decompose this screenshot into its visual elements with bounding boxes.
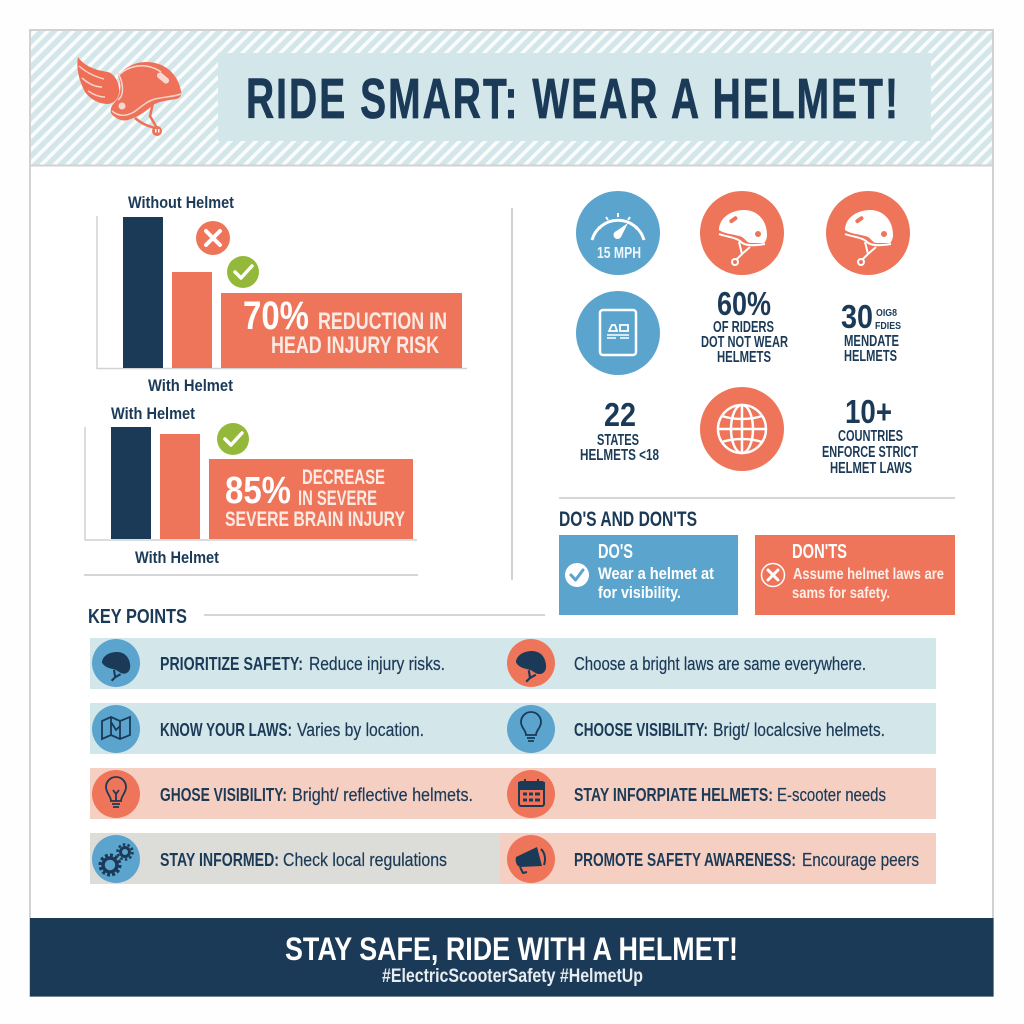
panel: do's: DO'S xyxy=(598,541,633,563)
callout: 85% decrease: SEVERE BRAIN INJURY xyxy=(225,508,405,531)
stat: 30: FDIES xyxy=(875,321,901,332)
callout: 85% decrease: 85% xyxy=(225,470,291,512)
panel: do's and don'ts: DO'S AND DON'TS xyxy=(559,508,697,531)
panel: don'ts: sams for safety. xyxy=(792,585,890,602)
header banner xyxy=(30,31,993,166)
key point: promote safety awareness: PROMOTE SAFETY AWARENESS: xyxy=(574,850,796,870)
stat: 60%: HELMETS xyxy=(717,349,771,366)
heading: key points: KEY POINTS xyxy=(88,606,187,628)
panel: don'ts xyxy=(755,535,955,615)
icon: globe xyxy=(700,387,784,471)
key point: know your laws xyxy=(92,705,424,753)
callout: 70% reduction: 70% xyxy=(243,294,309,338)
key point: choose a bright: Choose a bright laws are same everywhere. xyxy=(574,654,866,674)
stat: 10+: 10+ xyxy=(845,393,892,430)
bar chart: head injury: Without Helmet xyxy=(128,193,234,212)
panel: key points rows xyxy=(90,638,936,884)
bar chart: brain injury: With Helmet xyxy=(135,548,219,567)
stat: 30: MENDATE xyxy=(844,333,899,350)
icon: winged helmet logo xyxy=(77,57,181,136)
stat: 30: 30 xyxy=(841,298,873,335)
panel: don'ts: Assume helmet laws are xyxy=(793,566,944,583)
callout: 70% reduction xyxy=(221,293,462,368)
callout: 70% reduction: REDUCTION IN xyxy=(318,308,447,335)
icon: check badge xyxy=(227,256,259,288)
bar chart: brain injury xyxy=(85,404,417,567)
key point: choose visibility: Brigt/ localcsive helmets. xyxy=(713,720,885,740)
stat: 60%: DOT NOT WEAR xyxy=(701,334,788,351)
callout: 70% reduction: HEAD INJURY RISK xyxy=(271,332,439,359)
stat: 30: HELMETS xyxy=(844,348,897,365)
stat: 22: STATES xyxy=(597,432,639,449)
icon: speedometer 15 mph: 15 MPH xyxy=(597,245,641,262)
callout: 85% decrease: IN SEVERE xyxy=(298,487,377,510)
footer banner: STAY SAFE, RIDE WITH A HELMET! xyxy=(285,931,738,967)
key point: prioritize safety: Reduce injury risks. xyxy=(309,654,445,674)
bar chart: head injury: With Helmet xyxy=(148,376,233,395)
panel: do's xyxy=(559,535,738,615)
key point: prioritize safety xyxy=(92,639,445,687)
footer banner xyxy=(30,918,994,996)
stat: 22: 22 xyxy=(604,396,636,433)
stat: 10+ xyxy=(822,393,918,477)
panel: do's: for visibility. xyxy=(598,583,681,602)
panel: do's and don'ts xyxy=(559,508,955,615)
icon: tablet xyxy=(576,291,660,375)
stat: 10+: COUNTRIES xyxy=(838,428,903,445)
icon: cross badge xyxy=(196,221,230,255)
panel: do's: Wear a helmet at xyxy=(598,564,714,583)
bar chart: head injury xyxy=(97,193,467,395)
panel: don'ts: DON'TS xyxy=(792,541,847,563)
icon: helmet xyxy=(826,191,910,275)
stat: 22 xyxy=(580,396,659,464)
key point: promote safety awareness: Encourage peers xyxy=(802,850,919,870)
panel: statistics xyxy=(576,191,918,477)
key point: ghose visibility: GHOSE VISIBILITY: xyxy=(160,785,287,805)
icon: speedometer 15 mph xyxy=(576,191,660,275)
stat: 60%: OF RIDERS xyxy=(713,319,774,336)
key point: stay inforpiate helmets: STAY INFORPIATE HELMETS: xyxy=(574,785,773,805)
key point: choose visibility: CHOOSE VISIBILITY: xyxy=(574,720,708,740)
key point: choose visibility xyxy=(507,705,885,753)
stat: 30 xyxy=(841,298,901,365)
key point: promote safety awareness xyxy=(507,835,919,883)
footer banner: #ElectricScooterSafety #HelmetUp xyxy=(382,966,643,987)
key point: stay inforpiate helmets: E-scooter needs xyxy=(777,785,886,805)
stat: 10+: ENFORCE STRICT xyxy=(822,444,918,461)
key point: ghose visibility: Bright/ reflective helmets. xyxy=(292,785,473,805)
key point: ghose visibility xyxy=(92,770,473,818)
stat: 22: HELMETS <18 xyxy=(580,447,659,464)
key point: choose a bright xyxy=(507,639,866,687)
key point: stay informed: STAY INFORMED: xyxy=(160,850,279,870)
callout: 85% decrease xyxy=(209,459,413,539)
key point: stay informed xyxy=(92,835,447,883)
stat: 60% xyxy=(701,285,788,366)
stat: 60%: 60% xyxy=(717,285,771,322)
title xyxy=(218,53,931,141)
key point: know your laws: KNOW YOUR LAWS: xyxy=(160,720,292,740)
bar chart: brain injury: With Helmet xyxy=(111,404,195,423)
key point: know your laws: Varies by location. xyxy=(297,720,424,740)
icon: helmet xyxy=(700,191,784,275)
key point: stay informed: Check local regulations xyxy=(283,850,447,870)
callout: 85% decrease: DECREASE xyxy=(302,466,385,489)
stat: 10+: HELMET LAWS xyxy=(830,460,912,477)
key point: stay inforpiate helmets xyxy=(507,770,886,818)
icon: check badge xyxy=(217,423,249,455)
key point: prioritize safety: PRIORITIZE SAFETY: xyxy=(160,654,303,674)
stat: 30: OIG8 xyxy=(876,308,897,319)
